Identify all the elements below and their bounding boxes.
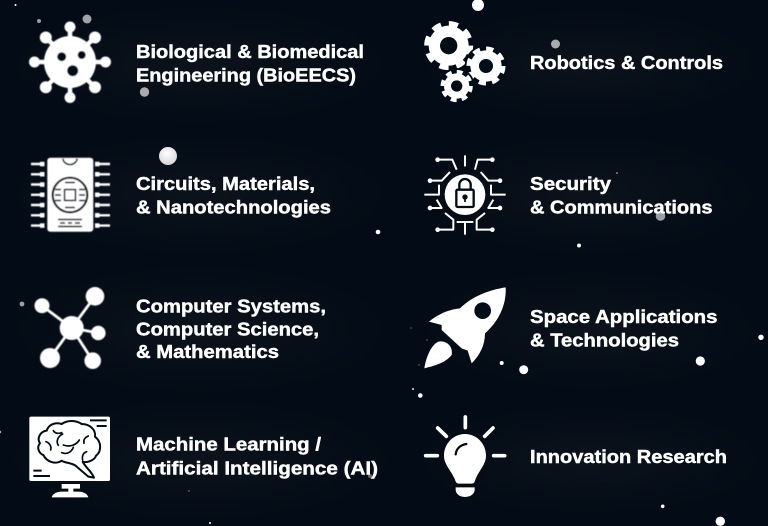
label: Machine Learning: Artificial Intelligence (AI) (136, 458, 378, 479)
icon: rocket (424, 287, 506, 368)
label: Machine Learning (136, 434, 378, 479)
label: Computer Systems: & Mathematics (136, 341, 279, 362)
label: Security (530, 173, 712, 218)
label: Space (530, 306, 718, 350)
icon: security lock (424, 155, 506, 235)
icon: virus (29, 22, 111, 103)
label: Circuits: & Nanotechnologies (136, 196, 331, 218)
icon: gears (427, 24, 507, 104)
label: Computer Systems: Computer Systems, (136, 296, 326, 316)
label: Biological & Biomedical Engineering: Engineering (BioEECS) (136, 64, 356, 86)
label: Biological & Biomedical Engineering (136, 41, 364, 86)
label: Innovation: Innovation Research (530, 446, 727, 467)
label: Circuits: Circuits, Materials, (136, 173, 315, 194)
label: Space: Space Applications (530, 306, 718, 327)
label: Space: & Technologies (530, 329, 679, 350)
label: Security: & Communications (530, 197, 712, 218)
label: Circuits (136, 173, 331, 218)
label: Biological & Biomedical Engineering: Biological & Biomedical (136, 41, 364, 62)
label: Machine Learning: Machine Learning / (136, 434, 321, 455)
labels (136, 41, 727, 479)
label: Robotics: Robotics & Controls (530, 52, 723, 73)
icon: microchip (31, 158, 110, 232)
label: Computer Systems: Computer Science, (136, 318, 319, 340)
icon: network (34, 287, 106, 369)
icon: light bulb (426, 417, 505, 497)
icon: monitor with brain (29, 417, 110, 497)
label: Computer Systems (136, 296, 326, 362)
label: Security: Security (530, 173, 612, 194)
